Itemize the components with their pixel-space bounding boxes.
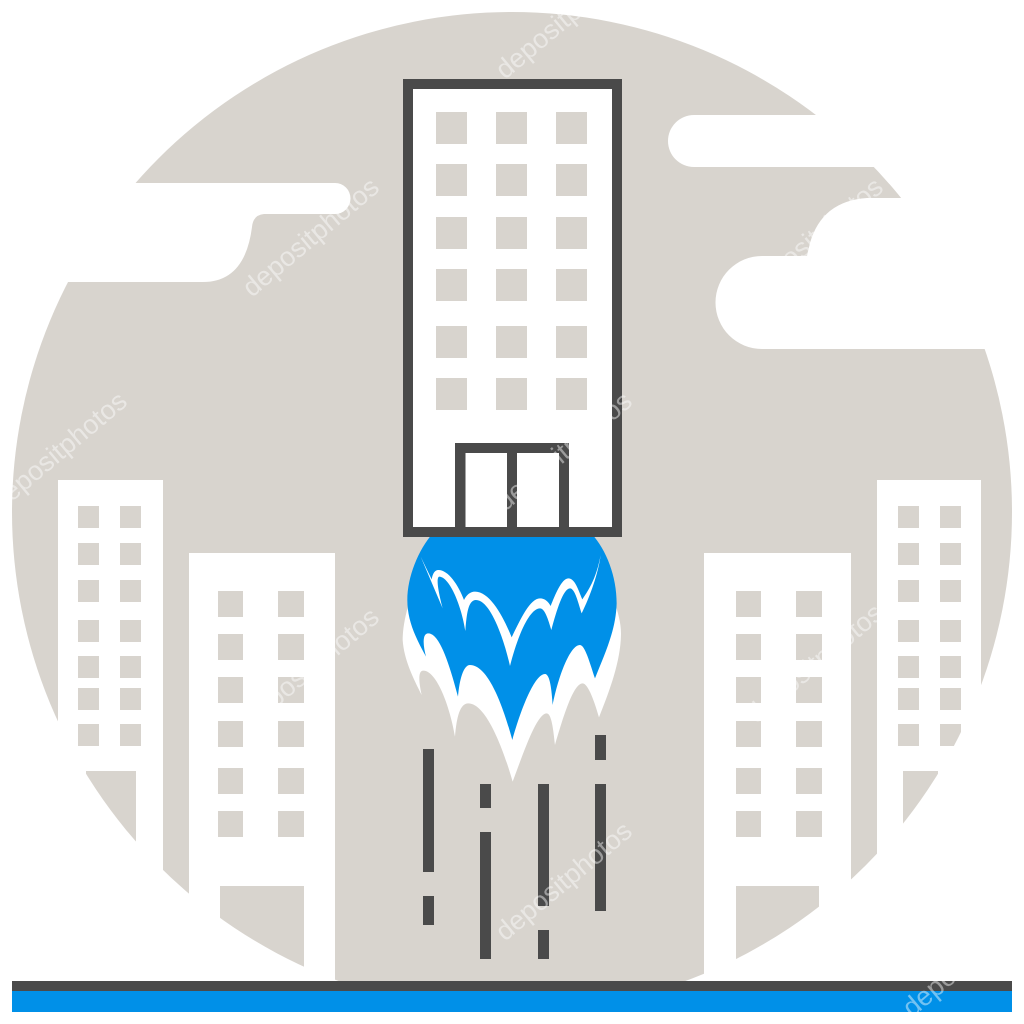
front right building (704, 553, 851, 974)
rocket building (408, 84, 617, 533)
front left building (189, 553, 335, 1024)
back left building (58, 480, 163, 870)
inner white zigzag (421, 555, 601, 666)
watermark text: depositphotos (490, 386, 638, 517)
watermark text: depositphotos (237, 172, 385, 303)
back right building (877, 480, 981, 854)
building windows (436, 112, 587, 410)
speed streaks (423, 735, 606, 959)
left city buildings (58, 480, 335, 1024)
outer white flame (403, 600, 621, 782)
right city buildings (704, 480, 981, 1024)
watermark text: depositphotos (237, 602, 385, 733)
ground bar (12, 981, 1012, 1012)
blue flame (407, 533, 617, 740)
watermark text: depositphotos (741, 598, 889, 729)
building door (455, 443, 569, 533)
watermark text: depositphotos (490, 816, 638, 947)
watermark text: depositphotos (741, 172, 889, 303)
building body (408, 84, 617, 532)
clouds (0, 115, 1024, 349)
rocket flame (403, 533, 621, 782)
